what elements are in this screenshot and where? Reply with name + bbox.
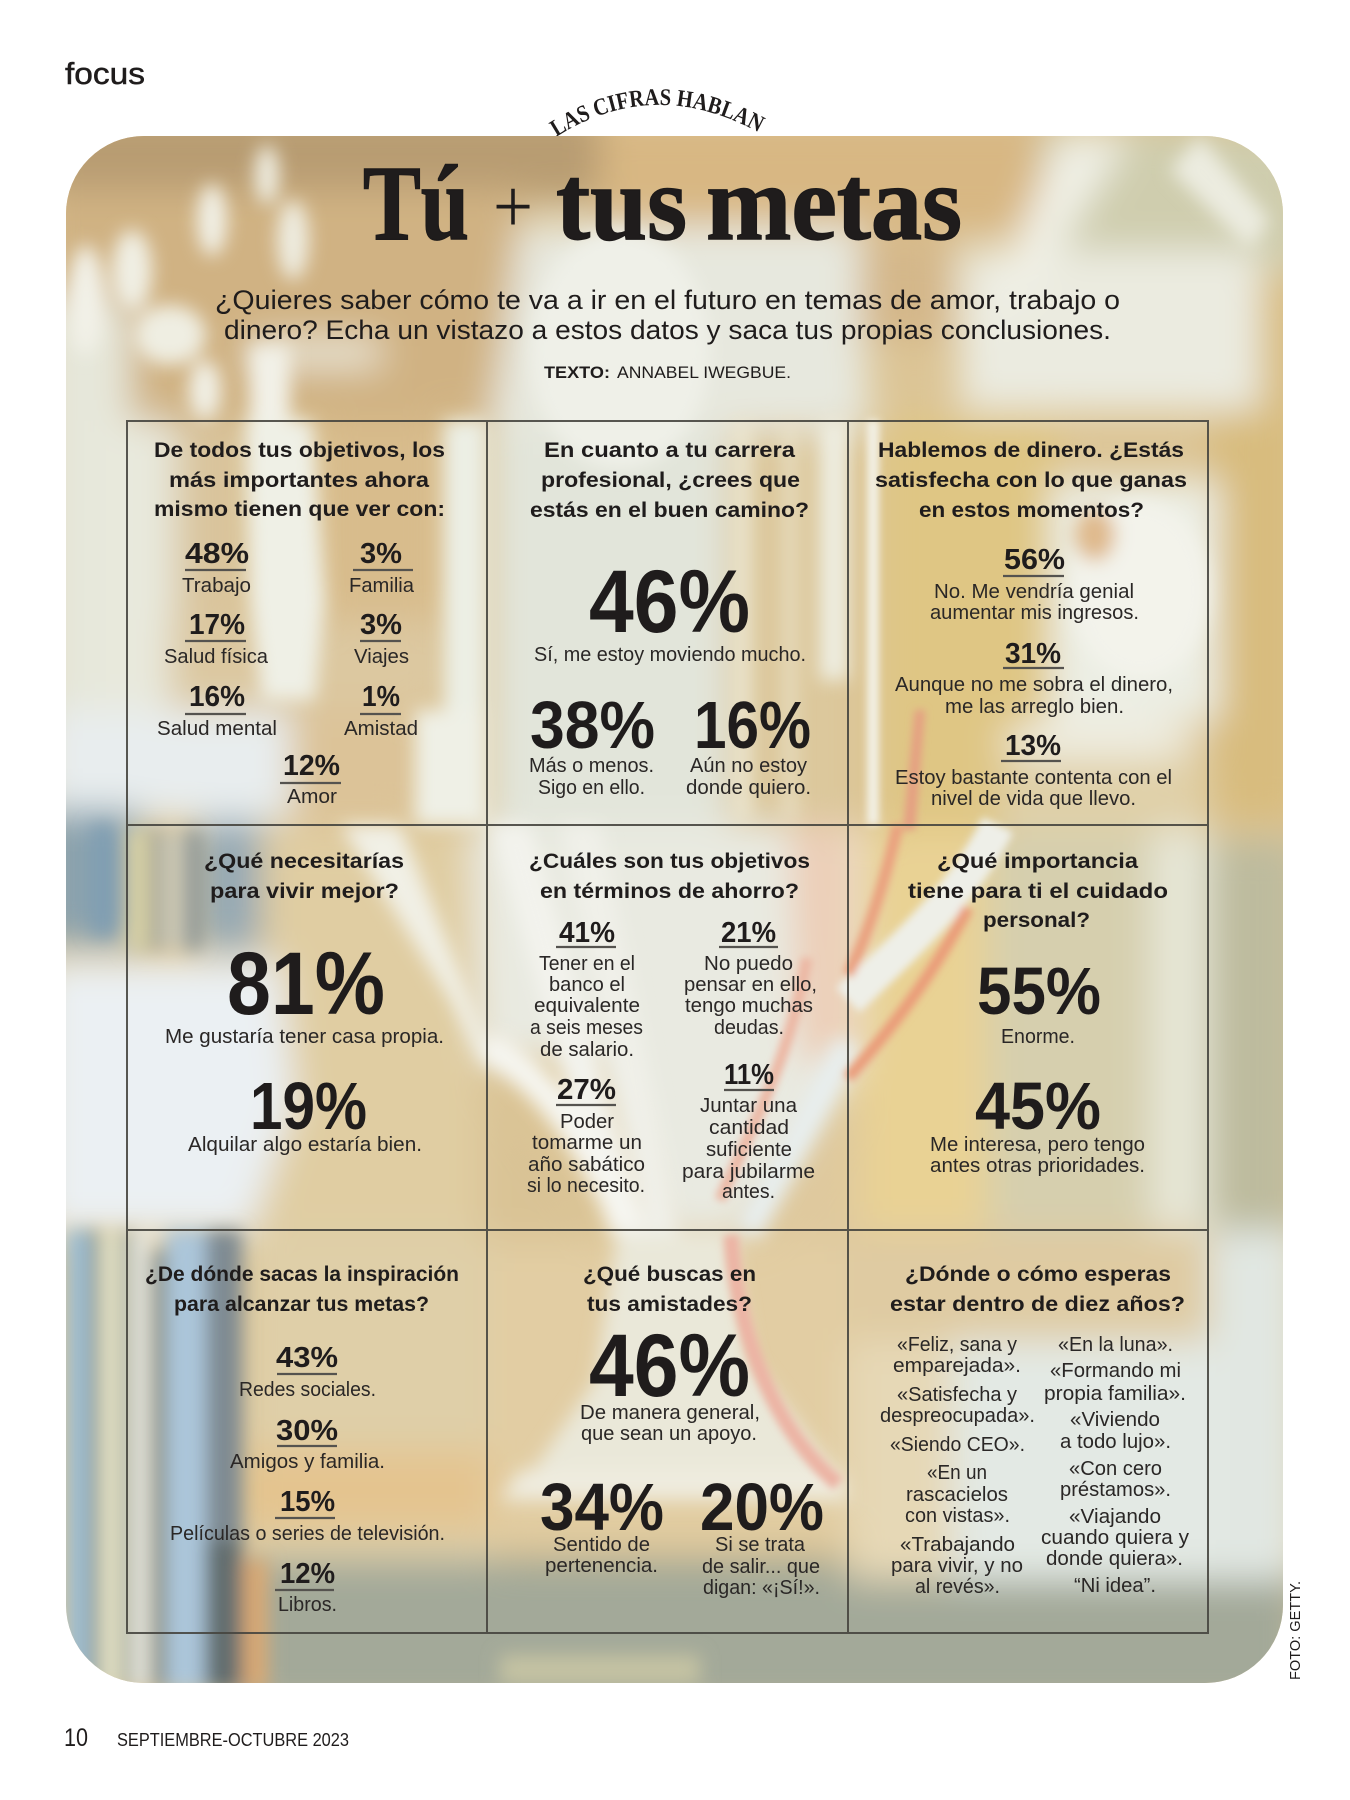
stat: 34%: 34% bbox=[540, 1470, 664, 1545]
heading: objetivos bbox=[154, 439, 445, 521]
heading: dinero: satisfecha con lo que ganas bbox=[875, 469, 1187, 492]
stat: 1% amistad: Amistad bbox=[344, 718, 418, 740]
stat: 41%: a seis meses bbox=[530, 1017, 643, 1039]
stat: 56%: No. Me vendría genial bbox=[934, 581, 1134, 603]
stat: 21%: 21% bbox=[721, 917, 776, 949]
heading: carrera bbox=[530, 439, 809, 522]
quotes: right column: «En la luna». bbox=[1058, 1334, 1173, 1356]
panel: ahorro bbox=[527, 850, 817, 1203]
stat: 11%: Juntar una bbox=[700, 1095, 798, 1117]
quotes: left column: «Trabajando bbox=[900, 1534, 1015, 1556]
stat: 3% familia bbox=[349, 538, 415, 597]
heading: carrera: En cuanto a tu carrera bbox=[544, 439, 795, 462]
kicker: las cifras hablan: LAS CIFRAS HABLAN bbox=[548, 89, 766, 136]
stat: 27%: tomarme un bbox=[532, 1132, 642, 1154]
survey grid lines bbox=[127, 421, 1208, 1633]
stat: 17% salud física bbox=[164, 609, 269, 668]
stat: 81% bbox=[165, 933, 444, 1048]
stat: 46%: que sean un apoyo. bbox=[581, 1423, 757, 1445]
stat: 21%: pensar en ello, bbox=[684, 974, 817, 996]
stat: 41%: de salario. bbox=[540, 1039, 634, 1061]
byline: ANNABEL IWEGBUE. bbox=[617, 363, 791, 382]
stat: 3% familia: Familia bbox=[349, 575, 415, 597]
quotes: right column: a todo lujo». bbox=[1060, 1431, 1171, 1453]
quotes: left column: rascacielos bbox=[906, 1484, 1008, 1506]
title: Tú bbox=[363, 145, 469, 263]
heading: diez años bbox=[890, 1263, 1185, 1316]
title: tus bbox=[556, 145, 687, 263]
heading: objetivos: De todos tus objetivos, los bbox=[154, 439, 445, 462]
stat: 16% salud mental: 16% bbox=[189, 681, 245, 713]
stat: 16%: 16% bbox=[694, 688, 811, 763]
stat: 21%: tengo muchas bbox=[685, 995, 813, 1017]
heading: cuidado personal: ¿Qué importancia bbox=[937, 850, 1138, 873]
panel: amistades bbox=[540, 1263, 824, 1599]
stat: 21% bbox=[684, 917, 817, 1039]
stat: 15%: Películas o series de televisión. bbox=[170, 1523, 445, 1545]
heading: amistades: tus amistades? bbox=[587, 1293, 752, 1316]
stat: 16% salud mental bbox=[157, 681, 277, 740]
stat: 3% viajes: Viajes bbox=[354, 646, 409, 668]
stat: 81%: Me gustaría tener casa propia. bbox=[165, 1026, 444, 1048]
photo credit: FOTO: GETTY. bbox=[1287, 1581, 1304, 1680]
stat: 43%: Redes sociales. bbox=[239, 1379, 376, 1401]
heading: cuidado personal bbox=[908, 850, 1168, 932]
stat: 56%: 56% bbox=[1004, 544, 1065, 576]
heading: cuidado personal: tiene para ti el cuidado bbox=[908, 880, 1168, 903]
heading: cuidado personal: personal? bbox=[983, 909, 1090, 932]
panel: inspiración bbox=[145, 1263, 459, 1616]
quotes: right column: «Con cero bbox=[1069, 1458, 1162, 1480]
panel: dentro de diez años bbox=[880, 1263, 1189, 1598]
heading: vivir mejor: ¿Qué necesitarías bbox=[204, 850, 404, 873]
stat: 12% bbox=[275, 1558, 337, 1616]
stat: 48% trabajo: 48% bbox=[185, 538, 249, 570]
heading: vivir mejor: para vivir mejor? bbox=[210, 880, 399, 903]
heading: diez años: estar dentro de diez años? bbox=[890, 1293, 1185, 1316]
stat: 34%: pertenencia. bbox=[545, 1555, 658, 1577]
stat: 45%: antes otras prioridades. bbox=[930, 1155, 1145, 1177]
heading: dinero: Hablemos de dinero. ¿Estás bbox=[878, 439, 1184, 462]
stat: 21%: No puedo bbox=[704, 953, 793, 975]
quotes: left column: emparejada». bbox=[893, 1355, 1021, 1377]
stat: 1% amistad bbox=[344, 681, 418, 740]
stat: 34% bbox=[540, 1470, 664, 1577]
stat: 45%: 45% bbox=[975, 1069, 1101, 1144]
stat: 11%: suficiente bbox=[706, 1139, 792, 1161]
stat: 31%: Aunque no me sobra el dinero, bbox=[895, 674, 1173, 696]
stat: 41%: banco el bbox=[549, 974, 625, 996]
stat: 16%: Aún no estoy bbox=[690, 755, 807, 777]
quotes: left column: «Siendo CEO». bbox=[890, 1434, 1025, 1456]
quotes: right column: préstamos». bbox=[1060, 1479, 1171, 1501]
heading: ahorro: ¿Cuáles son tus objetivos bbox=[529, 850, 810, 873]
section label: focus: focus bbox=[65, 56, 145, 91]
stat: 16% bbox=[686, 688, 811, 799]
quotes: right column: donde quiera». bbox=[1046, 1548, 1183, 1570]
stat: 30% bbox=[230, 1415, 385, 1473]
stat: 34%: Sentido de bbox=[553, 1534, 650, 1556]
stat: 27% bbox=[527, 1074, 645, 1197]
heading: amistades bbox=[583, 1263, 756, 1316]
stat: 31% bbox=[895, 638, 1173, 718]
page number: 10 bbox=[64, 1724, 88, 1752]
stat: 46% bbox=[534, 551, 806, 666]
stat: 31%: 31% bbox=[1005, 638, 1061, 670]
byline: TEXTO: bbox=[544, 363, 610, 382]
quotes: left column: despreocupada». bbox=[880, 1405, 1035, 1427]
stat: 27%: 27% bbox=[557, 1074, 616, 1106]
stat: 27%: Poder bbox=[560, 1111, 614, 1133]
stat: 46%: De manera general, bbox=[580, 1402, 760, 1424]
stat: 30%: Amigos y familia. bbox=[230, 1451, 385, 1473]
stat: 13%: nivel de vida que llevo. bbox=[931, 788, 1136, 810]
stat: 17% salud física: Salud física bbox=[164, 646, 269, 668]
stat: 41%: equivalente bbox=[534, 995, 640, 1017]
stat: 20%: 20% bbox=[700, 1470, 824, 1545]
stat: 46%: Sí, me estoy moviendo mucho. bbox=[534, 644, 806, 666]
quotes: right column: propia familia». bbox=[1044, 1383, 1186, 1405]
stat: 41%: 41% bbox=[559, 917, 615, 949]
stat: 48% trabajo: Trabajo bbox=[182, 575, 251, 597]
stat: 27%: si lo necesito. bbox=[527, 1175, 645, 1197]
heading: vivir mejor bbox=[204, 850, 404, 903]
quotes: right column: «Viviendo bbox=[1070, 1409, 1160, 1431]
stat: 11%: cantidad bbox=[709, 1117, 789, 1139]
stat: 11%: para jubilarme bbox=[682, 1161, 815, 1183]
stat: 31%: me las arreglo bien. bbox=[945, 696, 1124, 718]
intro text: dinero? Echa un vistazo a estos datos y saca tus propias conclusiones. bbox=[224, 315, 1111, 345]
stat: 12% amor: 12% bbox=[283, 750, 340, 782]
stat: 45% bbox=[930, 1069, 1145, 1177]
heading: objetivos: más importantes ahora bbox=[169, 469, 429, 492]
stat: 1% amistad: 1% bbox=[362, 681, 400, 713]
heading: ahorro: en términos de ahorro? bbox=[540, 880, 799, 903]
byline bbox=[544, 363, 791, 382]
quotes: right column: “Ni idea”. bbox=[1074, 1575, 1156, 1597]
issue date: SEPTIEMBRE-OCTUBRE 2023 bbox=[117, 1730, 349, 1750]
heading: carrera: profesional, ¿crees que bbox=[541, 469, 800, 492]
stat: 38%: Sigo en ello. bbox=[538, 777, 645, 799]
stat: 48% trabajo bbox=[182, 538, 251, 597]
panel: objetivos bbox=[154, 439, 445, 808]
quotes: left column bbox=[880, 1334, 1035, 1598]
stat: 3% familia: 3% bbox=[360, 538, 402, 570]
quotes: right column: cuando quiera y bbox=[1041, 1527, 1189, 1549]
title: metas bbox=[706, 145, 962, 263]
stat: 17% salud física: 17% bbox=[189, 609, 245, 641]
intro text: ¿Quieres saber cómo te va a ir en el futuro en temas de amor, trabajo o bbox=[215, 285, 1120, 315]
heading: inspiración bbox=[145, 1263, 459, 1316]
stat: 46%: 46% bbox=[589, 551, 750, 651]
stat: 46%: 46% bbox=[589, 1315, 750, 1415]
stat: 81%: 81% bbox=[227, 933, 385, 1033]
stat: 20%: digan: «¡Sí!». bbox=[703, 1577, 820, 1599]
stat: 21%: deudas. bbox=[714, 1017, 784, 1039]
heading: dinero: en estos momentos? bbox=[919, 499, 1144, 522]
stat: 11%: 11% bbox=[724, 1059, 774, 1091]
quotes: left column: «Feliz, sana y bbox=[897, 1334, 1017, 1356]
stat: 19%: Alquilar algo estaría bien. bbox=[188, 1134, 422, 1156]
title: + bbox=[493, 165, 533, 249]
stat: 12%: 12% bbox=[280, 1558, 335, 1590]
quotes: left column: con vistas». bbox=[905, 1505, 1010, 1527]
heading: objetivos: mismo tienen que ver con: bbox=[154, 498, 445, 521]
quotes: left column: «En un bbox=[927, 1462, 987, 1484]
panel: dinero bbox=[875, 439, 1187, 810]
heading: dinero bbox=[875, 439, 1187, 522]
heading: amistades: ¿Qué buscas en bbox=[583, 1263, 756, 1286]
stat: 12%: Libros. bbox=[278, 1594, 337, 1616]
stat: 3% viajes: 3% bbox=[360, 609, 402, 641]
stat: 19%: 19% bbox=[250, 1069, 367, 1144]
stat: 16%: donde quiero. bbox=[686, 777, 811, 799]
stat: 20%: de salir... que bbox=[702, 1556, 820, 1578]
heading: carrera: estás en el buen camino? bbox=[530, 499, 809, 522]
stat: 56% bbox=[930, 544, 1139, 624]
heading: inspiración: para alcanzar tus metas? bbox=[174, 1293, 429, 1316]
stat: 55%: Enorme. bbox=[1001, 1026, 1075, 1048]
stat: 13%: Estoy bastante contenta con el bbox=[895, 767, 1172, 789]
quotes: left column: para vivir, y no bbox=[891, 1555, 1023, 1577]
quotes: right column: «Viajando bbox=[1069, 1506, 1161, 1528]
stat: 13% bbox=[895, 730, 1172, 810]
stat: 43%: 43% bbox=[276, 1342, 338, 1374]
quotes: left column: «Satisfecha y bbox=[897, 1384, 1017, 1406]
stat: 55%: 55% bbox=[977, 954, 1101, 1029]
stat: 43% bbox=[239, 1342, 376, 1401]
stat: 19% bbox=[188, 1069, 422, 1156]
stat: 41%: Tener en el bbox=[539, 953, 635, 975]
stat: 20%: Si se trata bbox=[715, 1534, 806, 1556]
stat: 38%: Más o menos. bbox=[529, 755, 654, 777]
title bbox=[363, 145, 962, 263]
quotes: left column: al revés». bbox=[915, 1576, 1000, 1598]
heading: inspiración: ¿De dónde sacas la inspiración bbox=[145, 1263, 459, 1286]
stat: 3% viajes bbox=[354, 609, 409, 668]
quotes: right column: «Formando mi bbox=[1050, 1360, 1181, 1382]
stat: 15%: 15% bbox=[280, 1486, 335, 1518]
stat: 45%: Me interesa, pero tengo bbox=[930, 1134, 1145, 1156]
stat: 15% bbox=[170, 1486, 445, 1545]
stat: 20% bbox=[700, 1470, 824, 1599]
heading: diez años: ¿Dónde o cómo esperas bbox=[905, 1263, 1171, 1286]
stat: 11% bbox=[682, 1059, 815, 1203]
stat: 16% salud mental: Salud mental bbox=[157, 718, 277, 740]
intro text bbox=[215, 285, 1120, 345]
quotes: right column bbox=[1041, 1334, 1189, 1597]
stat: 30%: 30% bbox=[276, 1415, 338, 1447]
stat: 56%: aumentar mis ingresos. bbox=[930, 602, 1139, 624]
panel: carrera bbox=[529, 439, 811, 799]
stat: 12% amor: Amor bbox=[287, 786, 337, 808]
stat: 27%: año sabático bbox=[528, 1154, 645, 1176]
stat: 13%: 13% bbox=[1005, 730, 1061, 762]
stat: 41% bbox=[530, 917, 643, 1061]
stat: 38% bbox=[529, 688, 655, 799]
stat: 12% amor bbox=[280, 750, 341, 808]
heading: ahorro bbox=[529, 850, 810, 903]
stat: 38%: 38% bbox=[530, 688, 655, 763]
stat: 11%: antes. bbox=[722, 1181, 775, 1203]
panel: cuidado personal bbox=[908, 850, 1168, 1177]
panel: vivir mejor bbox=[165, 850, 444, 1156]
